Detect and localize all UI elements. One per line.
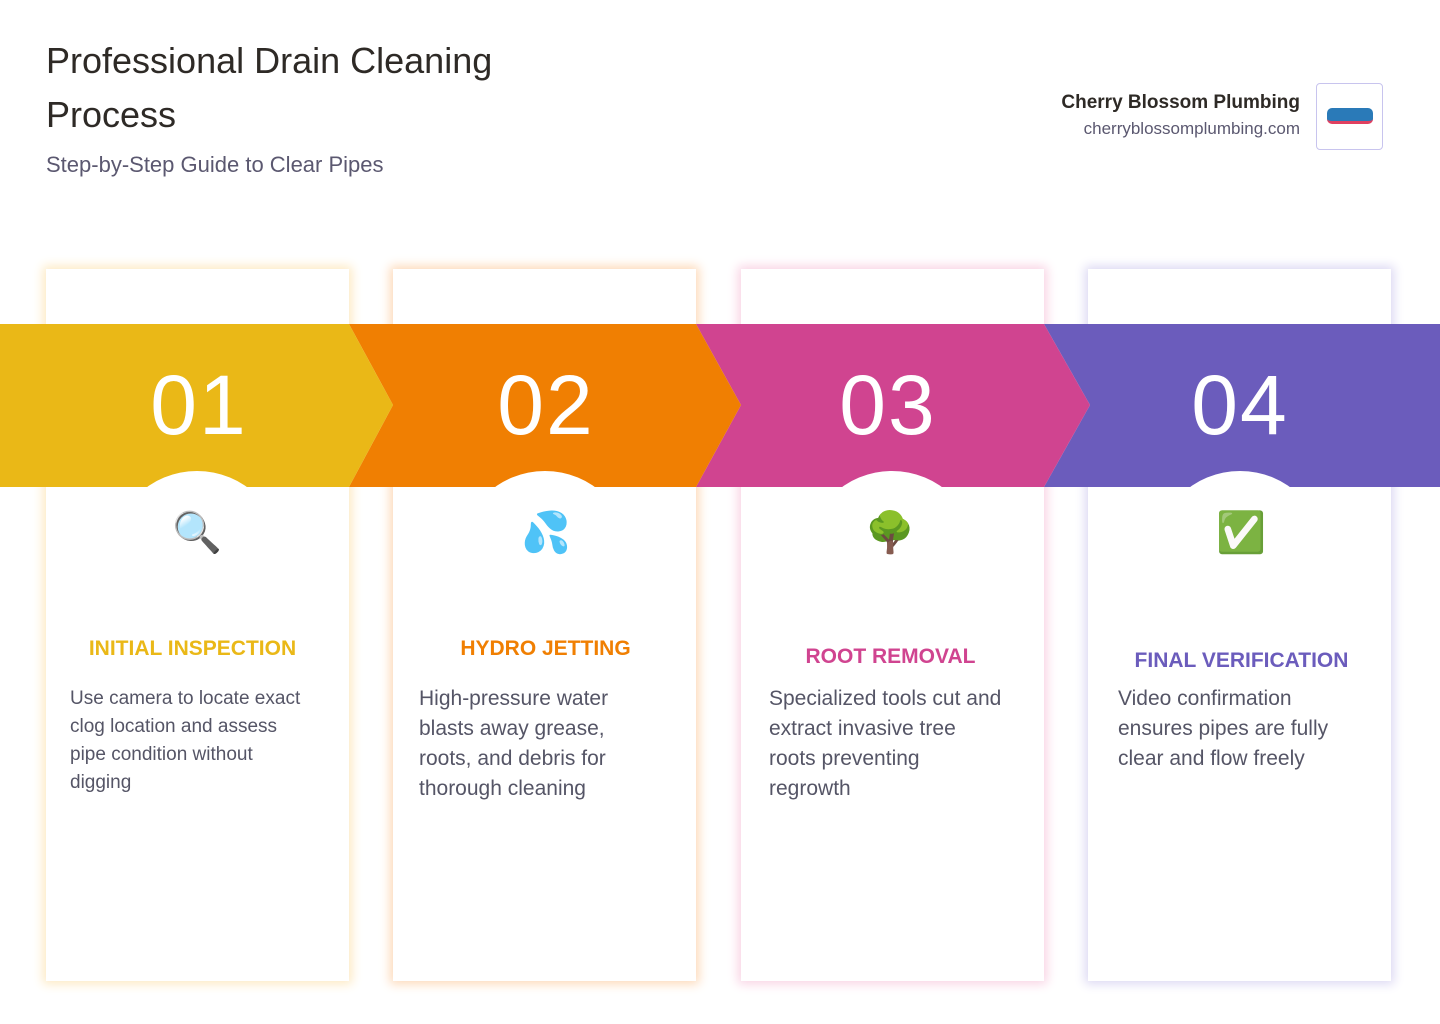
title: Professional Drain Cleaning (46, 40, 492, 81)
icon: tree: 🌳 (865, 510, 915, 556)
brand text: cherryblossomplumbing.com (1084, 119, 1300, 138)
card 4 (1088, 269, 1391, 981)
text: Specialized tools cut and extract invasive tree roots preventing regrowth (769, 687, 1001, 800)
card 2 (393, 269, 696, 981)
brand block (1061, 83, 1383, 150)
title: Process (46, 94, 176, 135)
icon: check: ✅ (1216, 510, 1266, 556)
circles (111, 471, 283, 643)
icon: water: 💦 (521, 510, 571, 556)
arrow band (0, 324, 1440, 487)
step 1 text: INITIAL INSPECTION (89, 637, 296, 660)
step 2 text: HYDRO JETTING (460, 637, 631, 660)
subtitle: Step-by-Step Guide to Clear Pipes (46, 152, 384, 177)
text: High-pressure water blasts away grease, roots, and debris for thorough cleaning (419, 687, 608, 800)
brand text: Cherry Blossom Plumbing (1061, 92, 1300, 113)
text: Use camera to locate exact clog location and assess pipe condition without digging (70, 688, 300, 793)
text: 02 (497, 358, 595, 452)
title (46, 40, 492, 135)
card 3 (741, 269, 1044, 981)
logo (1316, 83, 1383, 150)
brand text (1061, 92, 1300, 138)
card 1 (46, 269, 349, 981)
text: 03 (839, 358, 937, 452)
icon: magnifier: 🔍 (172, 510, 222, 556)
step 3 text: ROOT REMOVAL (806, 645, 975, 668)
text: 04 (1191, 358, 1289, 452)
numbers: 01 (150, 358, 248, 452)
step 4 text: FINAL VERIFICATION (1135, 649, 1348, 672)
text: Video confirmation ensures pipes are fully clear and flow freely (1118, 687, 1328, 770)
